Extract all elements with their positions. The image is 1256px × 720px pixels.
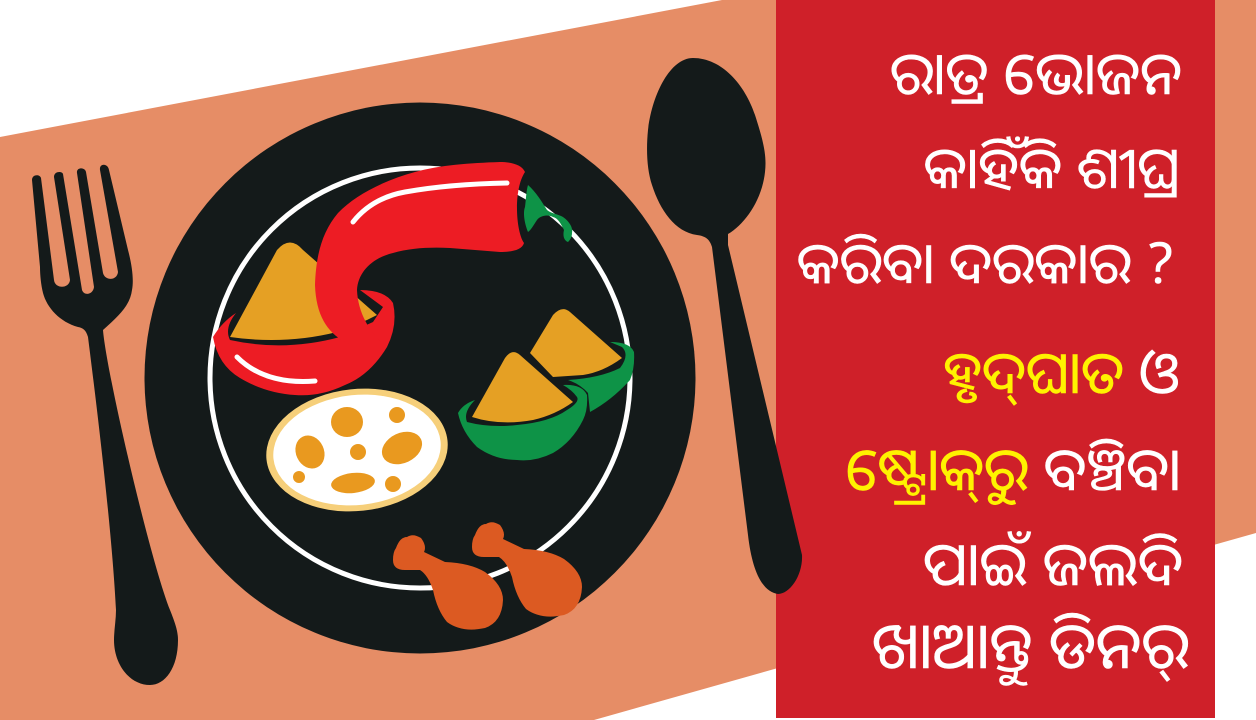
panel: red headline panel: [776, 0, 1215, 718]
icon: bread: [260, 380, 454, 520]
text block: answer: ଷ୍ଟ୍ରୋକ୍‌ରୁ ବଞ୍ଚିବା: [846, 427, 1181, 508]
icon: spoon: [647, 58, 802, 594]
icon: red chilli with spice bowl: [213, 162, 572, 395]
heading: question: ରାତ୍ର ଭୋଜନ: [890, 32, 1182, 112]
chilli body: [315, 162, 525, 348]
front spice mound: [472, 352, 573, 422]
icon: green spice bowls: [458, 309, 634, 460]
text block: answer: ହୃଦ୍‌ଘାତ ଓ: [943, 331, 1180, 411]
text block: answer: ଖାଆନ୍ତୁ ଡିନର୍: [872, 600, 1189, 687]
icon: chicken drumstick right: [472, 522, 582, 617]
back bowl: [568, 342, 634, 412]
icon: chicken drumstick left: [393, 535, 503, 630]
front bowl: [458, 385, 587, 460]
back spice mound: [530, 309, 622, 377]
red bowl: [213, 290, 395, 395]
plate: [144, 102, 696, 654]
chilli stem: [524, 185, 572, 242]
icon: fork: [32, 165, 178, 685]
chilli highlights: [353, 183, 507, 222]
heading: question: [797, 32, 1182, 300]
heading: question: କାହିଁକି ଶୀଘ୍ର: [923, 127, 1180, 205]
text block: answer: [846, 331, 1189, 687]
text block: answer: ପାଇଁ ଜଲଦି: [923, 521, 1183, 603]
spice mound: [230, 242, 377, 340]
heading: question: କରିବା ଦରକାର ?: [797, 222, 1175, 300]
